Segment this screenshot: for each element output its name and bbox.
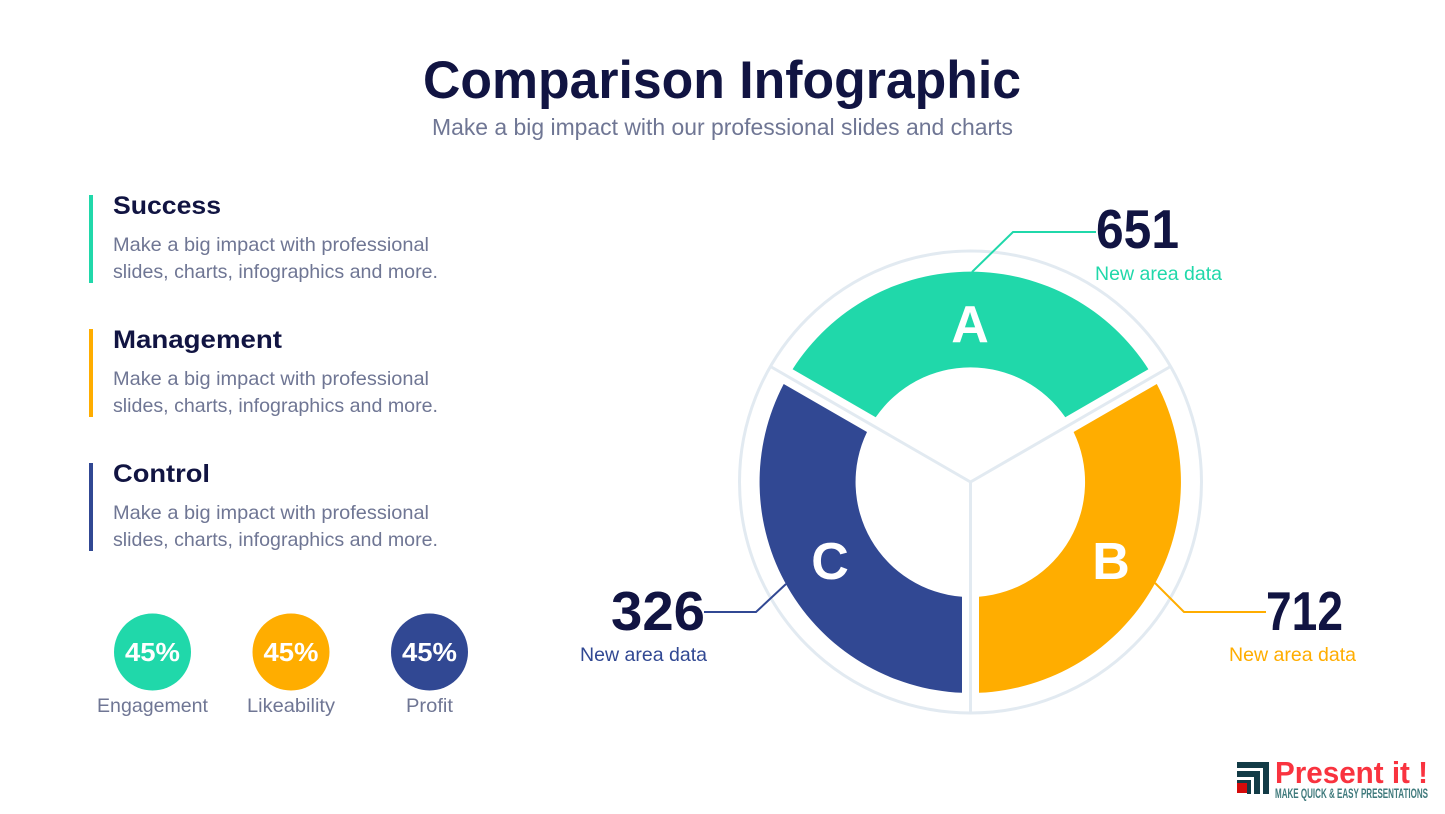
segment B: [979, 384, 1181, 693]
success body text: [113, 234, 438, 283]
callout: A 651: New area data: [1095, 263, 1222, 285]
control body text: [113, 502, 438, 551]
metric: likeability: Likeability: [247, 695, 335, 717]
control body text: slides, charts, infographics and more.: [113, 529, 438, 551]
outer guide ring and spokes: [740, 251, 1202, 713]
donut chart: [740, 251, 1202, 713]
metric: likeability: [247, 614, 335, 717]
callout: C 326: [580, 580, 786, 666]
metric: engagement: Engagement: [97, 695, 209, 717]
metric: profit: Profit: [406, 695, 454, 717]
callout: C 326: 326: [611, 580, 705, 642]
panel: success: [89, 192, 438, 283]
success body text: slides, charts, infographics and more.: [113, 261, 438, 283]
callout: A 651: 651: [1096, 198, 1179, 260]
callout: B 712: [1155, 580, 1356, 666]
subtitle: Make a big impact with our professional slides and charts: [432, 114, 1013, 140]
control accent bar: [89, 463, 93, 551]
success accent bar: [89, 195, 93, 283]
management body text: slides, charts, infographics and more.: [113, 395, 438, 417]
metric: profit: 45%: [402, 637, 457, 667]
callout: B 712: 712: [1266, 580, 1343, 642]
logo: Present it: [1237, 755, 1428, 801]
callout: A 651: [972, 198, 1222, 285]
title: Comparison Infographic: [423, 51, 1021, 110]
callout: B 712: New area data: [1229, 644, 1356, 666]
control heading: Control: [113, 460, 210, 488]
logo wordmark: Present it !: [1275, 755, 1428, 790]
segment A: [793, 272, 1148, 417]
success heading: Success: [113, 192, 221, 220]
logo icon: [1237, 762, 1269, 794]
segment letter C: C: [811, 533, 849, 591]
metric: engagement: [97, 614, 209, 717]
panel: management: [89, 326, 438, 417]
metric: profit: [391, 614, 468, 717]
panel: control: [89, 460, 438, 551]
management body text: Make a big impact with professional: [113, 368, 429, 390]
control body text: Make a big impact with professional: [113, 502, 429, 524]
metric: likeability: 45%: [264, 637, 318, 667]
management body text: [113, 368, 438, 417]
success body text: Make a big impact with professional: [113, 234, 429, 256]
metric: engagement: 45%: [125, 637, 180, 667]
management heading: Management: [113, 326, 283, 354]
management accent bar: [89, 329, 93, 417]
segment C: [760, 384, 962, 693]
callout: C 326: New area data: [580, 644, 707, 666]
segment letter A: A: [951, 296, 989, 354]
segment letter B: B: [1092, 533, 1130, 591]
